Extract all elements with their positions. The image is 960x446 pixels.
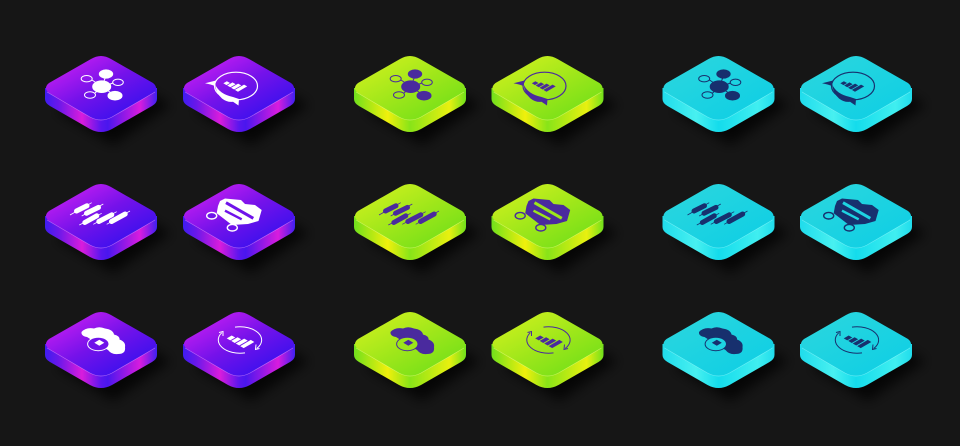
- tile: purple coal cart: [183, 184, 309, 273]
- tile: green chat chart: [492, 56, 618, 145]
- tile: purple network: [45, 56, 171, 145]
- tile: cyan chat chart: [800, 56, 926, 145]
- tile: cyan coal cart: [800, 184, 926, 273]
- panel: purple icon set: [45, 56, 309, 401]
- tile: green candlesticks: [354, 184, 480, 273]
- panel: green icon set: [354, 56, 618, 401]
- tile: purple candlesticks: [45, 184, 171, 273]
- tile: cyan cloud lock: [662, 312, 788, 401]
- tile: green refresh chart: [492, 312, 618, 401]
- tile: green coal cart: [492, 184, 618, 273]
- tile: purple cloud lock: [45, 312, 171, 401]
- tile: cyan candlesticks: [662, 184, 788, 273]
- tile: green network: [354, 56, 480, 145]
- tile: green cloud lock: [354, 312, 480, 401]
- panel: cyan icon set: [662, 56, 926, 401]
- tile: cyan network: [662, 56, 788, 145]
- tile: purple refresh chart: [183, 312, 309, 401]
- tile: cyan refresh chart: [800, 312, 926, 401]
- tile: purple chat chart: [183, 56, 309, 145]
